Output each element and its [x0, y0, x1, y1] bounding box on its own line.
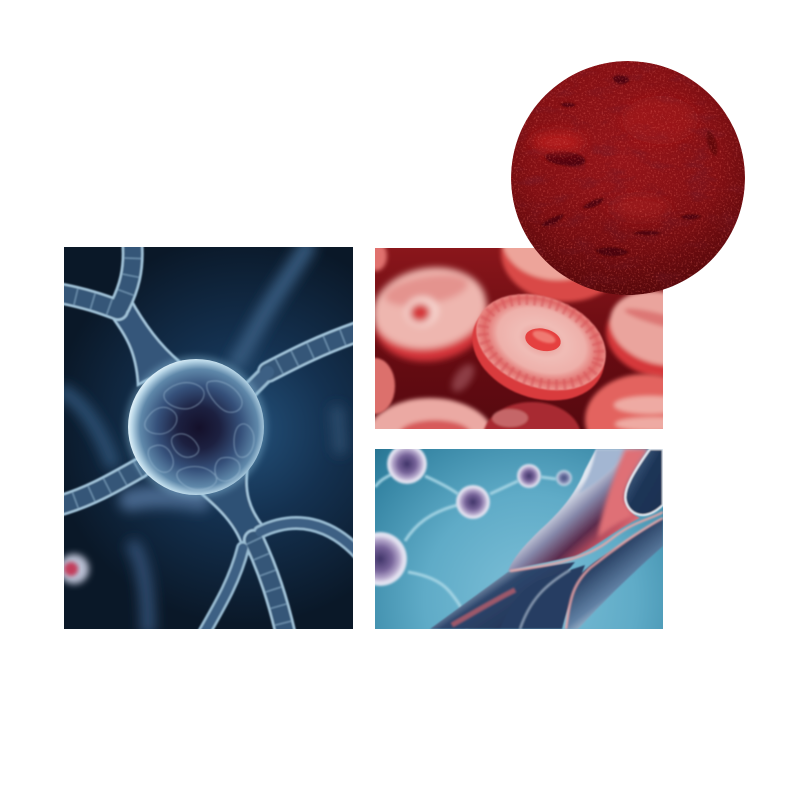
- lower right tube: [566, 518, 663, 629]
- upper tube highlight: [578, 449, 628, 494]
- red blood cell, left edge: [375, 356, 396, 416]
- middle tube: [520, 564, 586, 629]
- icon: red powder circle: [511, 61, 745, 295]
- lower left tube: [430, 562, 575, 629]
- blood vessel: [430, 449, 663, 629]
- pink strands: [452, 512, 663, 629]
- blurred highlight: [449, 362, 477, 394]
- icon: blurred red spot: [59, 554, 89, 584]
- red blood cell, right: [604, 290, 663, 378]
- panel: blood vessel and cells image: [353, 444, 663, 629]
- neuron cell body: [125, 356, 267, 498]
- red blood cell, center: [472, 293, 607, 402]
- cell nodes: [375, 449, 574, 588]
- red blood cell, bottom center: [482, 400, 581, 429]
- connecting filaments: [375, 474, 556, 629]
- powder clumps: [532, 76, 717, 256]
- red blood cell, upper center: [498, 248, 606, 304]
- background blurred dendrites: [64, 247, 340, 629]
- red blood cell, lower left: [375, 394, 490, 429]
- red blood cell, top-left corner: [375, 248, 390, 274]
- navy tube: [625, 449, 663, 515]
- main tube: [508, 449, 648, 571]
- red blood cell, upper left: [375, 262, 492, 366]
- red blood cell, lower right: [582, 372, 663, 429]
- pink band: [598, 449, 648, 538]
- neuron dendrites: [58, 240, 360, 640]
- panel: neuron cell image: [58, 240, 360, 640]
- panel: red blood cells image: [375, 248, 663, 429]
